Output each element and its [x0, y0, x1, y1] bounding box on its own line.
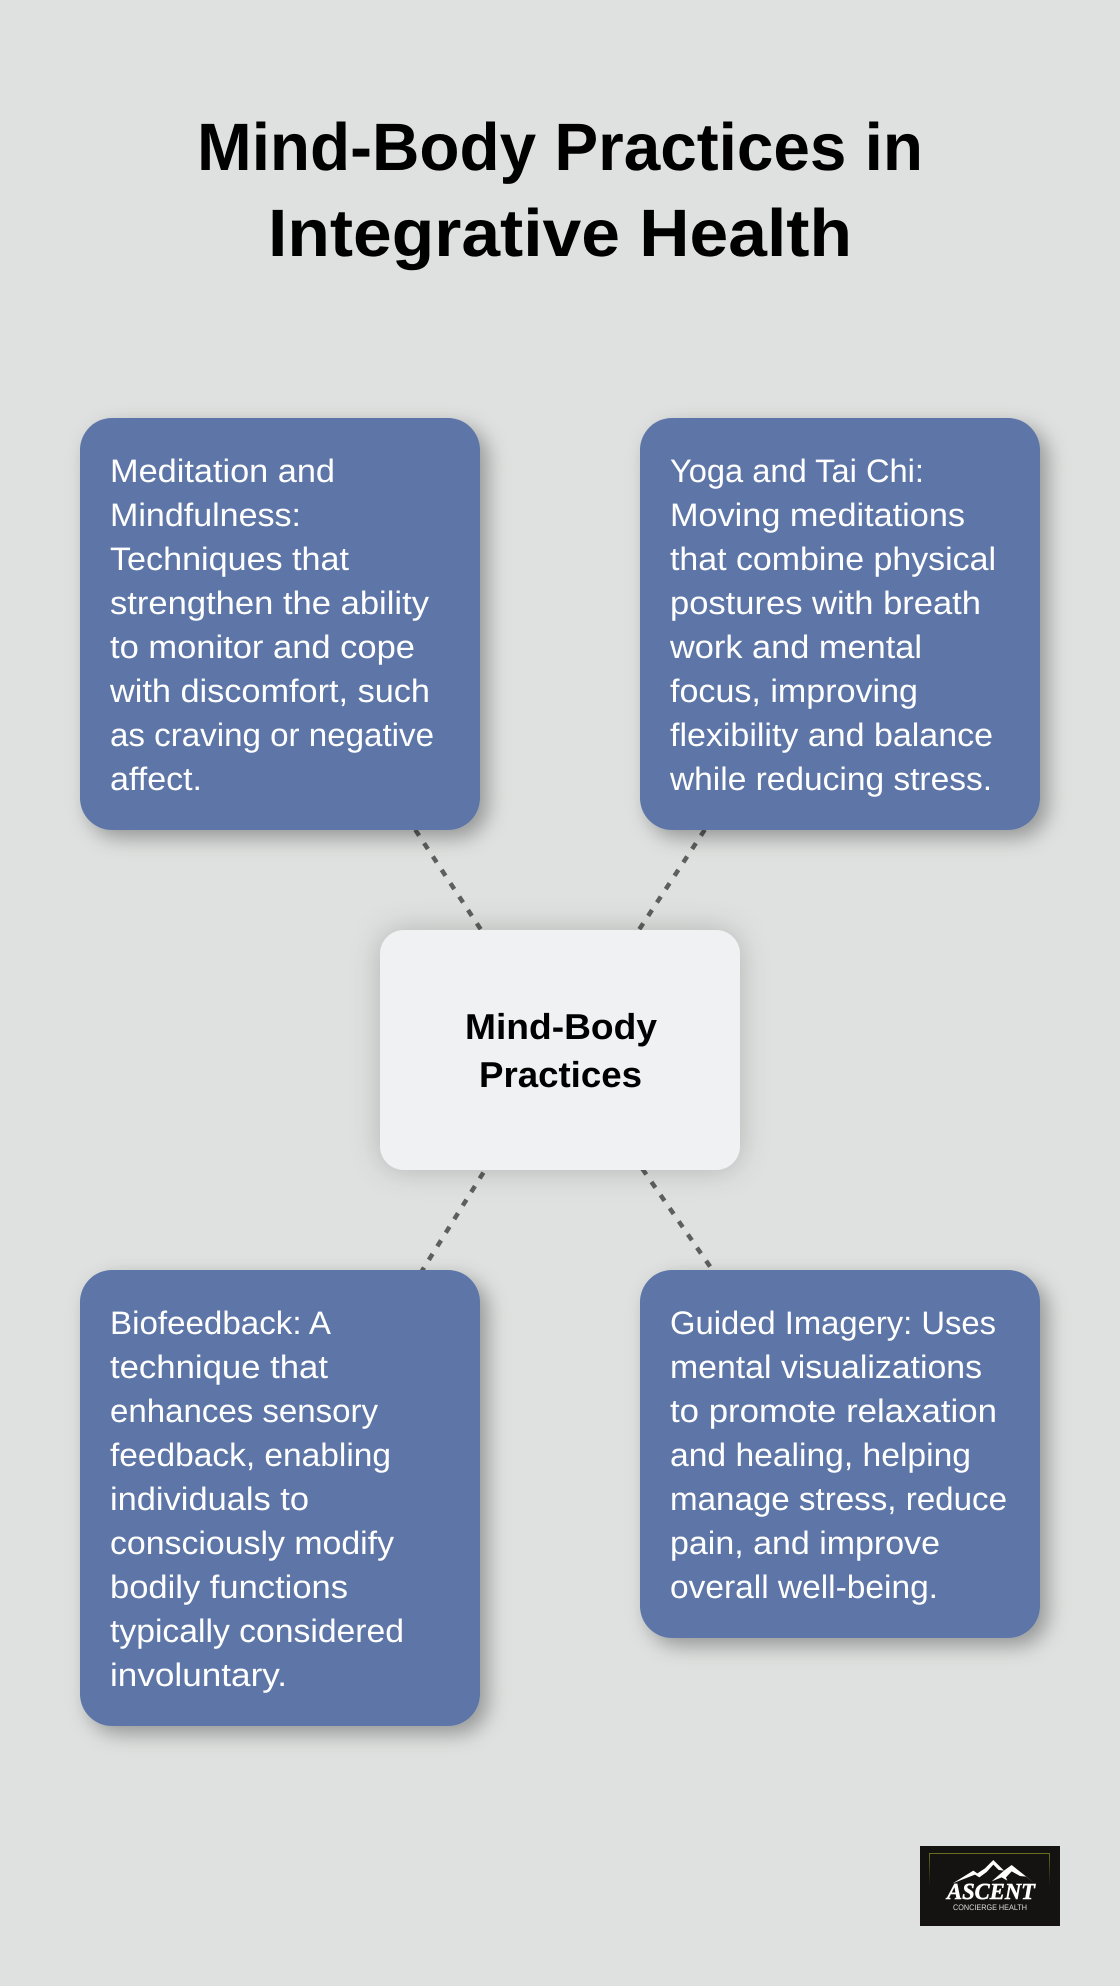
- card text: Techniques that: [110, 541, 349, 577]
- card text: strengthen the ability: [110, 585, 430, 621]
- panel: Guided Imagery: [640, 1270, 1040, 1638]
- card text: individuals to: [110, 1481, 309, 1517]
- card text: mental visualizations: [670, 1349, 982, 1385]
- title: Mind-Body Practices in: [197, 110, 923, 185]
- card text: Mindfulness:: [110, 497, 301, 533]
- card background: [80, 1270, 480, 1726]
- card text: as craving or negative: [110, 717, 434, 753]
- dashed connectors: [280, 624, 840, 1498]
- center label: Practices: [479, 1054, 642, 1095]
- card background: [640, 1270, 1040, 1638]
- card text: Meditation and: [110, 453, 335, 489]
- card text: pain, and improve: [670, 1525, 940, 1561]
- icon: mountains: [953, 1860, 1034, 1883]
- card text: focus, improving: [670, 673, 918, 709]
- card text: to promote relaxation: [670, 1393, 997, 1429]
- panel: Meditation and Mindfulness: [80, 418, 480, 830]
- card text: [110, 1305, 404, 1693]
- card text: feedback, enabling: [110, 1437, 391, 1473]
- tagline: CONCIERGE HEALTH: [953, 1903, 1027, 1912]
- panel: Biofeedback: [80, 1270, 480, 1726]
- card text: while reducing stress.: [669, 761, 992, 797]
- card text: work and mental: [669, 629, 922, 665]
- card text: [669, 453, 996, 797]
- panel: center node: [380, 930, 740, 1170]
- card text: [670, 1305, 1007, 1605]
- card text: overall well-being.: [670, 1569, 938, 1605]
- card text: Guided Imagery: Uses: [670, 1305, 996, 1341]
- card text: involuntary.: [110, 1657, 287, 1693]
- card text: typically considered: [110, 1613, 404, 1649]
- card text: Moving meditations: [670, 497, 965, 533]
- card text: [109, 453, 434, 797]
- card text: manage stress, reduce: [670, 1481, 1007, 1517]
- logo: Ascent Concierge Health: [920, 1846, 1060, 1926]
- title: Integrative Health: [268, 196, 852, 271]
- center box: [380, 930, 740, 1170]
- card text: to monitor and cope: [110, 629, 415, 665]
- card text: Biofeedback: A: [110, 1305, 331, 1341]
- center label: [465, 1006, 657, 1095]
- card text: Yoga and Tai Chi:: [670, 453, 924, 489]
- card text: technique that: [110, 1349, 328, 1385]
- card background: [80, 418, 480, 830]
- card text: flexibility and balance: [670, 717, 993, 753]
- panel: Yoga and Tai Chi: [640, 418, 1040, 830]
- card text: affect.: [110, 761, 202, 797]
- card text: postures with breath: [670, 585, 981, 621]
- center label: Mind-Body: [465, 1006, 657, 1047]
- card text: enhances sensory: [110, 1393, 379, 1429]
- card text: and healing, helping: [670, 1437, 971, 1473]
- card background: [640, 418, 1040, 830]
- card text: consciously modify: [110, 1525, 395, 1561]
- title: [197, 110, 923, 271]
- card text: bodily functions: [110, 1569, 348, 1605]
- card text: that combine physical: [670, 541, 996, 577]
- card text: with discomfort, such: [109, 673, 430, 709]
- wordmark: ASCENT: [945, 1879, 1036, 1904]
